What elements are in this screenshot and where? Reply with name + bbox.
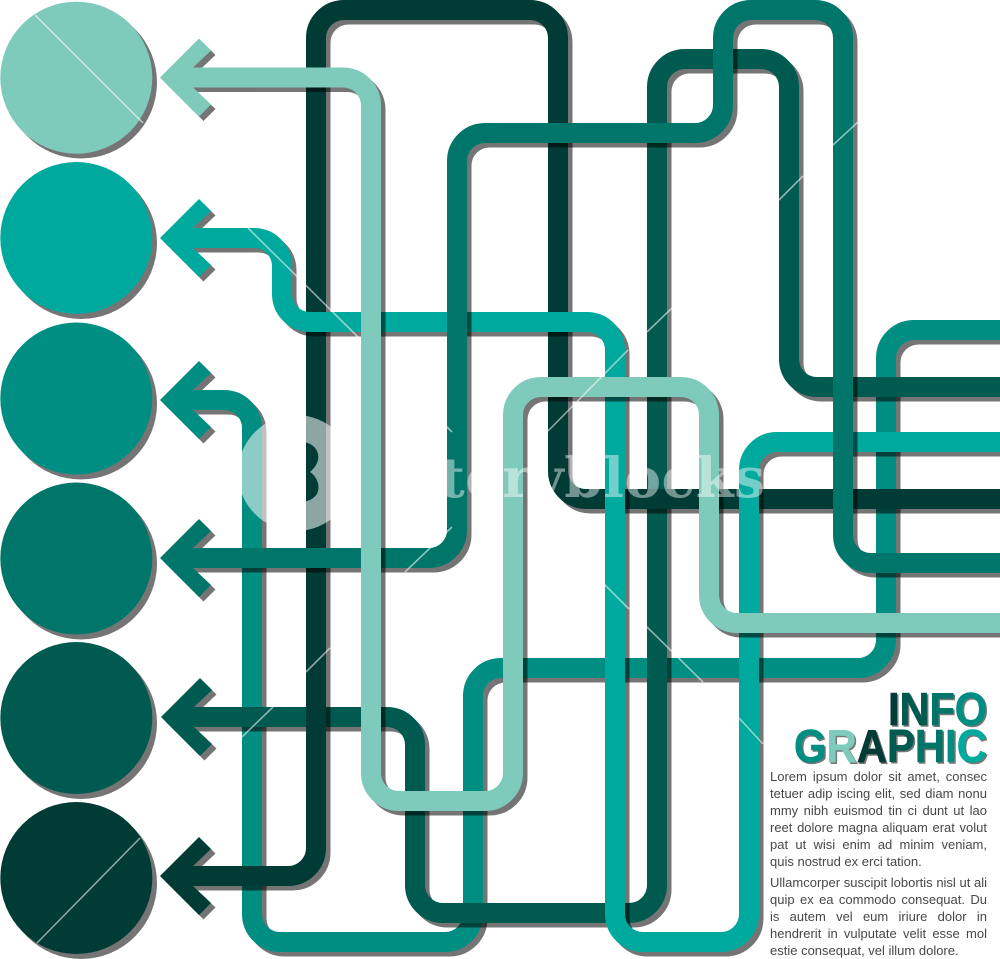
arrow route 1 light teal (160, 38, 1000, 806)
title (794, 683, 988, 774)
paragraph 2: Ullamcorper suscipit lobortis nisl ut ali (770, 875, 987, 890)
circle node 6 near black green (0, 802, 157, 959)
arrow route 2 bright teal (160, 199, 1000, 946)
paragraph 1: pat ut wisi enim ad minim veniam, (770, 837, 987, 852)
watermark: storyblocks (408, 445, 765, 510)
paragraph 1: Lorem ipsum dolor sit amet, consec (770, 769, 987, 784)
paragraph 2: hendrerit in vulputate velit esse mol (770, 926, 987, 941)
title line INFO shadow: INFO (890, 684, 988, 736)
body copy (770, 769, 987, 958)
watermark (35, 15, 858, 943)
paragraph 1: reet dolore magna aliquam erat volut (770, 820, 987, 835)
arrow route 5 dark green (161, 59, 1000, 918)
circle node 2 bright teal (0, 162, 157, 319)
arrow route 4 deep teal (160, 10, 1000, 602)
circle node 5 dark green (0, 642, 157, 799)
paragraph 1: mmy nibh euismod tin ci dunt ut lao (770, 803, 987, 818)
circle node 1 light teal (0, 2, 157, 158)
paragraph 2: estie consequat, vel illum dolore. (770, 943, 959, 958)
paragraph 1: quis nostrud ex erci tation. (770, 854, 922, 869)
paragraph 2: is autem vel eum iriure dolor in (770, 909, 987, 924)
arrow route 6 near black green (160, 10, 1000, 920)
paragraph 1 (770, 769, 987, 869)
title line GRAPHIC: GRAPHIC (794, 720, 987, 772)
paragraph 1: tetuer adip iscing elit, sed diam nonu (770, 786, 987, 801)
paragraph 2: quip ex ea commodo consequat. Du (770, 892, 987, 907)
paragraph 2 (770, 875, 987, 958)
circle node 4 deep teal (0, 482, 157, 640)
title line INFO: INFO (888, 683, 987, 735)
arrow route 3 medium teal (160, 330, 1000, 946)
circle node 3 medium teal (0, 322, 157, 480)
